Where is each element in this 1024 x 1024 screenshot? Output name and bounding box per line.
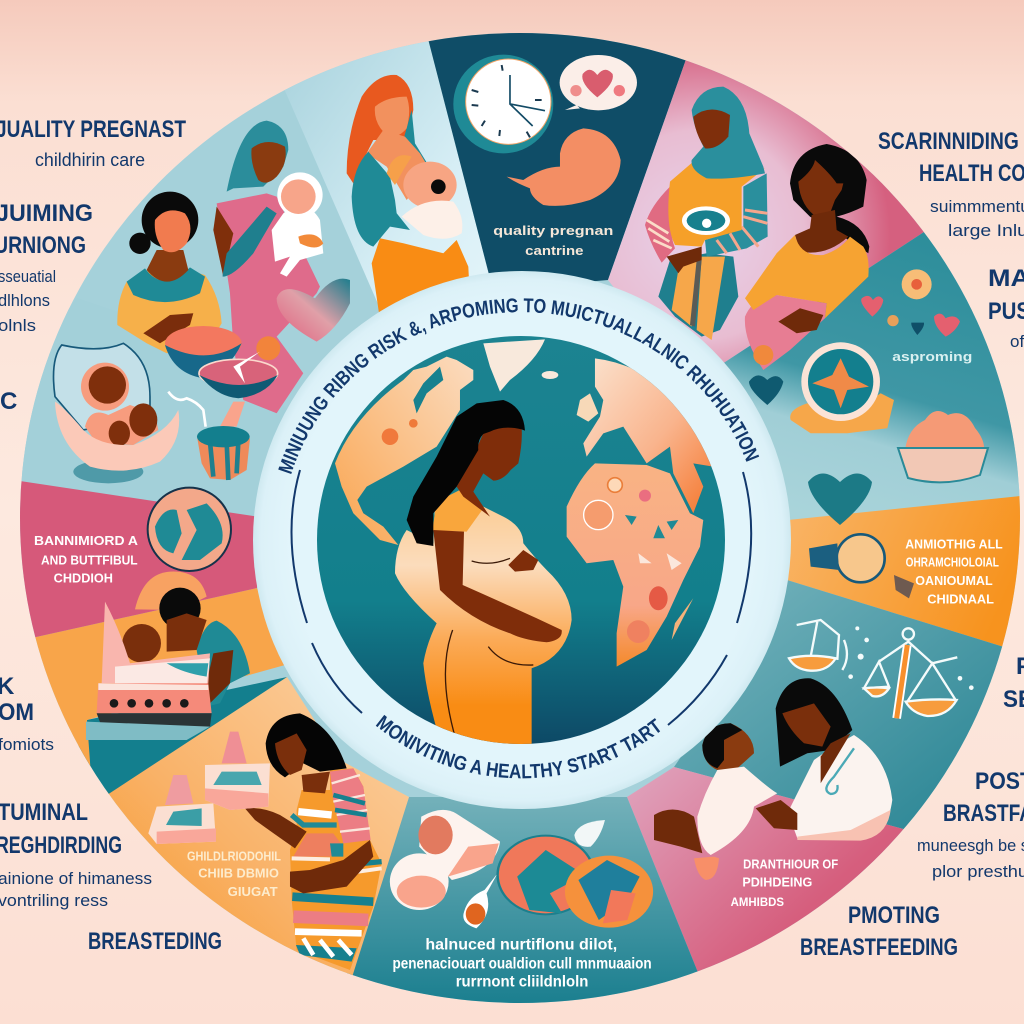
arm [245,808,307,848]
illustration: bottle badge and caption on orange [809,534,1003,606]
illustration: woman with bowls [117,192,280,398]
baby body [697,767,777,855]
bowl [55,402,179,471]
caption: BANNIMIORD A [34,534,138,548]
bowl back [165,326,242,356]
heart left [861,296,883,317]
hand [667,247,702,273]
face [275,733,307,775]
skirt [658,253,738,337]
collar [127,267,205,302]
skirt stripes [292,858,382,873]
fruit [905,411,984,450]
illustration: crib, globe and parent: CHDDIOH [54,572,113,586]
illustration: woman in striped dress with boxes: GIUGAT [228,885,278,899]
stethoscope [826,748,854,794]
illustration: bottles and patterned spheres [390,810,653,990]
greenland [483,339,545,392]
teal inlets [413,367,443,413]
label: himaness: ainione of himaness [0,869,152,888]
spoon [256,336,280,360]
illustration: balance scales [789,620,974,718]
north america [335,357,473,545]
hand [387,155,412,185]
face [798,160,843,218]
head halo [81,363,129,411]
dome [53,343,150,430]
globe [317,336,725,744]
label: of: of [1010,332,1024,351]
cup one [419,810,500,880]
scarf [404,110,426,162]
caption: GHILDLRIODOHIL [187,850,281,864]
illustration: bottle badge and caption on orange: OANIOUMAL [915,574,993,588]
uk [577,393,598,422]
box right [205,763,270,810]
segment: teal bottom [347,797,698,1003]
face [251,142,286,183]
illustration: bottles and patterned spheres: penenaciouart oualdion cull mnmuaaion [392,954,652,972]
label: quality pregnancy: JUALITY PREGNAST [0,116,186,143]
label: breasteding: BREASTEDING [88,928,222,955]
v neck skin [821,733,851,783]
illustration: woman in striped dress with boxes [148,713,382,970]
label: essential: sseuatial [0,267,56,286]
ring title bottom: MONIVITING A HEALTHY START TART [376,714,660,778]
medallion [790,393,894,433]
illustration: teal heart at orange segment [808,474,872,525]
illustration: pregnant woman in orange blouse [745,144,869,370]
hair [129,233,151,254]
drop [887,315,899,326]
heart right [934,314,960,337]
fan [135,572,207,610]
pregnant woman: arm [433,530,562,642]
sphere right [565,856,653,928]
small markers on america [382,428,398,445]
baby head [122,624,161,663]
illustration: mother with baby and teal scarf [213,121,350,413]
label: plor: plor presthu [932,862,1024,881]
bowl [898,448,988,482]
left scale [797,620,847,670]
dark heart [749,375,783,405]
segment: orange right [787,495,1024,655]
chest stripes [298,812,332,815]
label: terminal: TUMINAL [0,799,88,826]
pregnant woman: upper hand [508,550,538,572]
skirt [372,238,470,320]
steam [168,392,206,427]
illustration: woman in hijab holding ultrasound [645,87,768,340]
shelf [86,722,210,740]
centre ring [253,271,791,809]
segment: orange lower left [90,677,409,990]
coat [789,735,892,840]
face [375,97,409,136]
face [693,110,730,149]
scarf [692,87,765,179]
crib [102,602,210,683]
cup [197,438,250,480]
illustration: hearts, flower and medallion [749,269,972,433]
shadow [73,460,143,483]
blouse [745,235,869,318]
chest [367,130,430,200]
hair [266,713,347,777]
belly [293,833,343,857]
segment: teal lower right [674,580,1002,829]
sphere left [498,836,594,914]
illustration: crib, globe and parent [34,488,250,740]
small icon [894,575,914,598]
caption: quality pregnan [493,223,613,238]
scan disc [682,206,730,235]
pregnant woman: dress [395,490,572,760]
leg [129,403,157,437]
forearm [290,840,373,893]
label: large: large Inlu [948,221,1024,240]
knee [109,421,130,446]
fetus [507,128,621,206]
droplet [574,820,605,847]
baby wrap [402,201,462,239]
pregnant woman: neck and face [457,427,522,517]
caption: pink segment: DRANTHIOUR OF [743,857,838,871]
segment: lower left pale teal [22,308,70,481]
illustration: basket of peach shapes [898,411,988,482]
segment: pale blue upper [285,41,488,302]
head [89,366,126,404]
left sleeve [645,187,675,263]
label: letter C: C [0,388,17,415]
illustration: baby in pod and cup [53,343,250,483]
bowl front [199,359,278,387]
label: breastfeeding: BREASTFEEDING [800,934,958,961]
torso [352,152,410,247]
segment: teal right [724,232,1020,496]
segment: dark navy top [428,33,686,282]
illustration: woman with red hair feeding baby [347,75,470,320]
left labels [0,116,222,955]
baby head [702,723,754,770]
label: breastfeeding short: REGHDIRDING [0,832,122,859]
clock [453,55,553,153]
scarf [227,121,288,192]
baby body [85,405,158,445]
sun flower [902,269,932,299]
segment: pink lower right [627,767,904,972]
africa symbols [584,478,682,643]
hair [776,678,852,767]
iceland [542,371,558,379]
hair [790,144,869,253]
neck [795,210,848,253]
centre scale [903,628,914,640]
pregnant woman: hair [407,400,525,546]
badge [837,534,885,582]
blouse [117,270,222,353]
madagascar [672,598,693,640]
baby head [403,162,457,208]
caption line two: cantrine [525,243,583,258]
illustration: bottles and patterned spheres: rurrnont cliildnloln [456,972,588,990]
dress [290,768,382,970]
caption: pink segment: PDIHDEING [742,876,812,890]
parent [197,621,250,707]
segment: orange left [35,588,284,766]
illustration: bottle badge and caption on orange: OHRAMCHIOLOIAL [906,556,999,570]
globe [148,488,231,571]
top [668,162,765,247]
heart [277,279,350,342]
illustration: doctor with baby [654,678,892,880]
skirt [745,295,827,370]
speech bubble [560,55,637,110]
caption: pink segment [731,857,838,909]
baby [272,206,323,277]
sleeve [223,207,277,277]
sleeve stripes [332,775,370,832]
label: ress: vontriling ress [0,891,108,910]
caption lines: ANMIOTHIG ALL [905,537,1003,551]
hair [347,75,413,183]
face [782,703,831,747]
segment: pink and lilac [608,60,924,362]
neck and face [147,250,188,282]
arm skin [213,207,233,277]
small heart [911,323,924,335]
flower [753,345,773,365]
illustration: clock, speech bubble and fetus [453,55,637,258]
columns [672,257,698,327]
dots [848,626,974,690]
hand [143,313,193,343]
hand [778,308,823,333]
africa [567,463,703,667]
eurasia [583,358,713,513]
ring arcs [291,470,751,725]
cup rim [197,426,250,447]
illustration: crib, globe and parent: AND BUTTFIBUL [41,553,138,567]
label: pmoting: PMOTING [848,902,940,929]
right labels [800,128,1024,961]
cup two [390,853,449,910]
pregnant woman: sleeve [432,490,483,532]
segment: small teal left [78,677,287,794]
ring title top: MINIUUNG RIBNG RISK &, ARPOMING TO MUICTUALLALNIC RHUHUATION [278,298,760,474]
spoon [463,873,498,928]
captions: halnuced nurtiflonu dilot, [425,935,617,953]
hand [756,800,797,830]
stem [220,402,245,427]
illustration: bottle badge and caption on orange: CHIDNAAL [927,592,994,606]
pregnant woman: line detail [445,558,533,740]
label: childbirth care: childhirin care [35,150,145,170]
neck [302,772,330,793]
continents and pregnant woman [335,339,713,760]
illustration: woman in striped dress with boxes: CHIIB DBMIO [198,866,279,880]
right sleeve [705,173,768,257]
sleeve pink [330,768,371,843]
caption: asproming [892,349,972,364]
box left [148,803,216,844]
segment: pink left [20,481,257,638]
dress [217,193,320,413]
caption: pink segment: AMHIBDS [731,895,784,909]
